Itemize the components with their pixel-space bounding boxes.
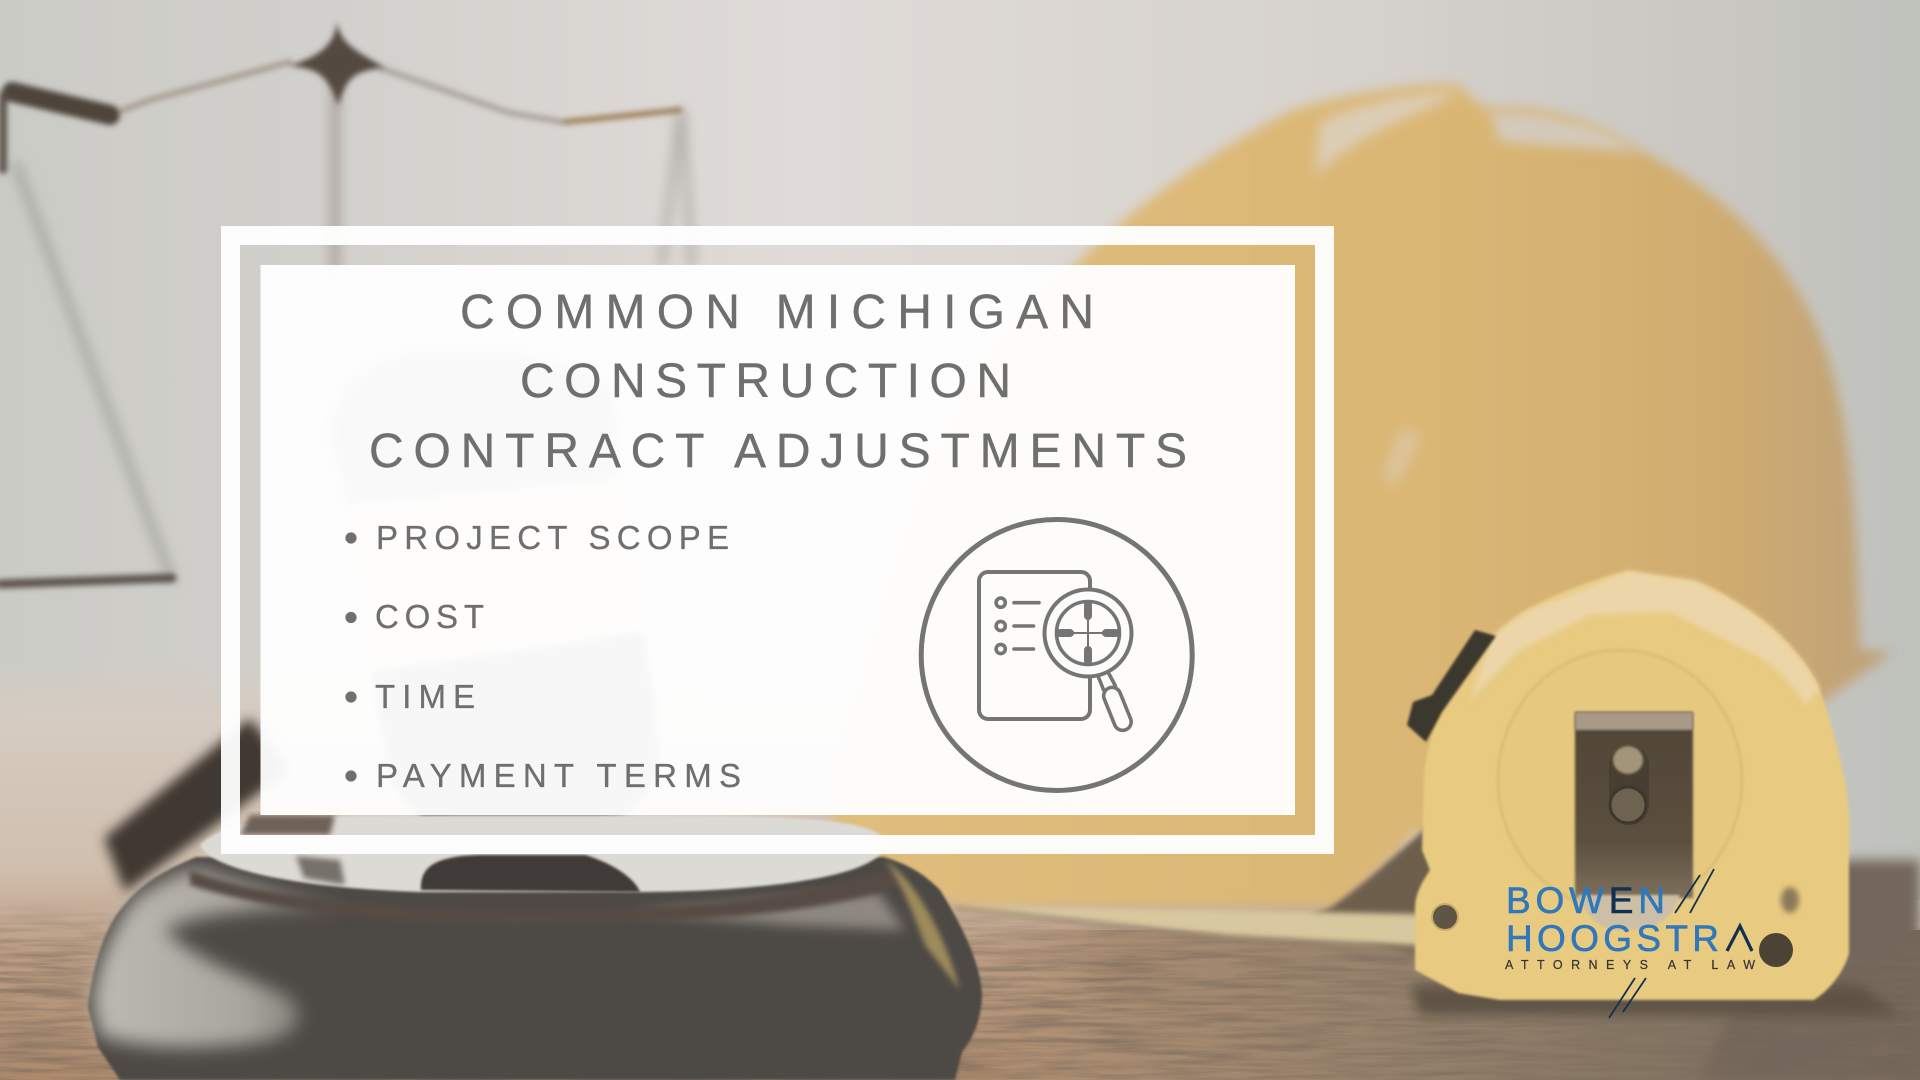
list item: project scope: PROJECT SCOPE <box>376 519 729 556</box>
yellow hard hat <box>830 84 1893 906</box>
list item: time: TIME <box>375 678 475 715</box>
title: COMMON MICHIGAN <box>460 286 1094 339</box>
logo: tagline: ATTORNEYS AT LAW <box>1505 958 1755 972</box>
logo: Hoogstra: HOOGSTR <box>1506 918 1719 959</box>
icon: document under magnifying glass in circle <box>921 520 1192 790</box>
logo: Bowen Hoogstra Attorneys at Law <box>1505 869 1755 1018</box>
list item: payment terms: PAYMENT TERMS <box>376 757 741 794</box>
tape measure: lock tab <box>1407 630 1496 742</box>
title <box>369 286 1187 478</box>
block: left silver highlight <box>93 868 345 1047</box>
list item: cost: COST <box>375 598 484 635</box>
block: under-rim dark band <box>190 868 905 925</box>
tape measure <box>1407 571 1850 1000</box>
tape measure: clip top band <box>1575 712 1693 730</box>
photo background: wooden table <box>0 706 1920 1080</box>
tape measure: ridged rim <box>1470 571 1820 705</box>
gavel head, mostly covered by panel <box>330 349 660 838</box>
tape measure: screw <box>1610 787 1646 823</box>
white outer frame <box>221 226 1334 854</box>
block: reflected gavel <box>421 855 640 892</box>
logo: caret A <box>1727 926 1752 951</box>
block: right yellow reflection <box>885 860 960 990</box>
tape measure: notch shadow <box>1781 887 1799 913</box>
tape strip and shadow on the table <box>955 825 1900 1015</box>
tape measure: belt clip <box>1575 712 1693 898</box>
tape measure: left rivet <box>1432 904 1458 930</box>
tape measure: slot highlight <box>1613 746 1643 774</box>
panel: content card <box>260 265 1295 815</box>
logo: Bowen: BOWEN <box>1506 880 1665 921</box>
scales of justice, blurred <box>0 22 692 584</box>
gavel sound block <box>88 815 982 1080</box>
tape measure: slot <box>1609 745 1649 825</box>
tape measure: inner dial ring <box>1498 650 1742 910</box>
block: right grey band <box>632 890 905 930</box>
tape measure: clip lower silver bowl <box>1577 895 1680 930</box>
tape measure: body <box>1415 571 1850 1000</box>
title: CONTRACT ADJUSTMENTS <box>369 425 1187 478</box>
block: dark body <box>88 857 982 1080</box>
logo: slashes <box>1609 869 1714 1018</box>
tape measure: right rivet <box>1759 933 1793 967</box>
bullet list <box>346 519 741 794</box>
title: CONSTRUCTION <box>520 355 1011 408</box>
gavel handle <box>104 718 290 892</box>
block: reflective top <box>200 815 885 892</box>
